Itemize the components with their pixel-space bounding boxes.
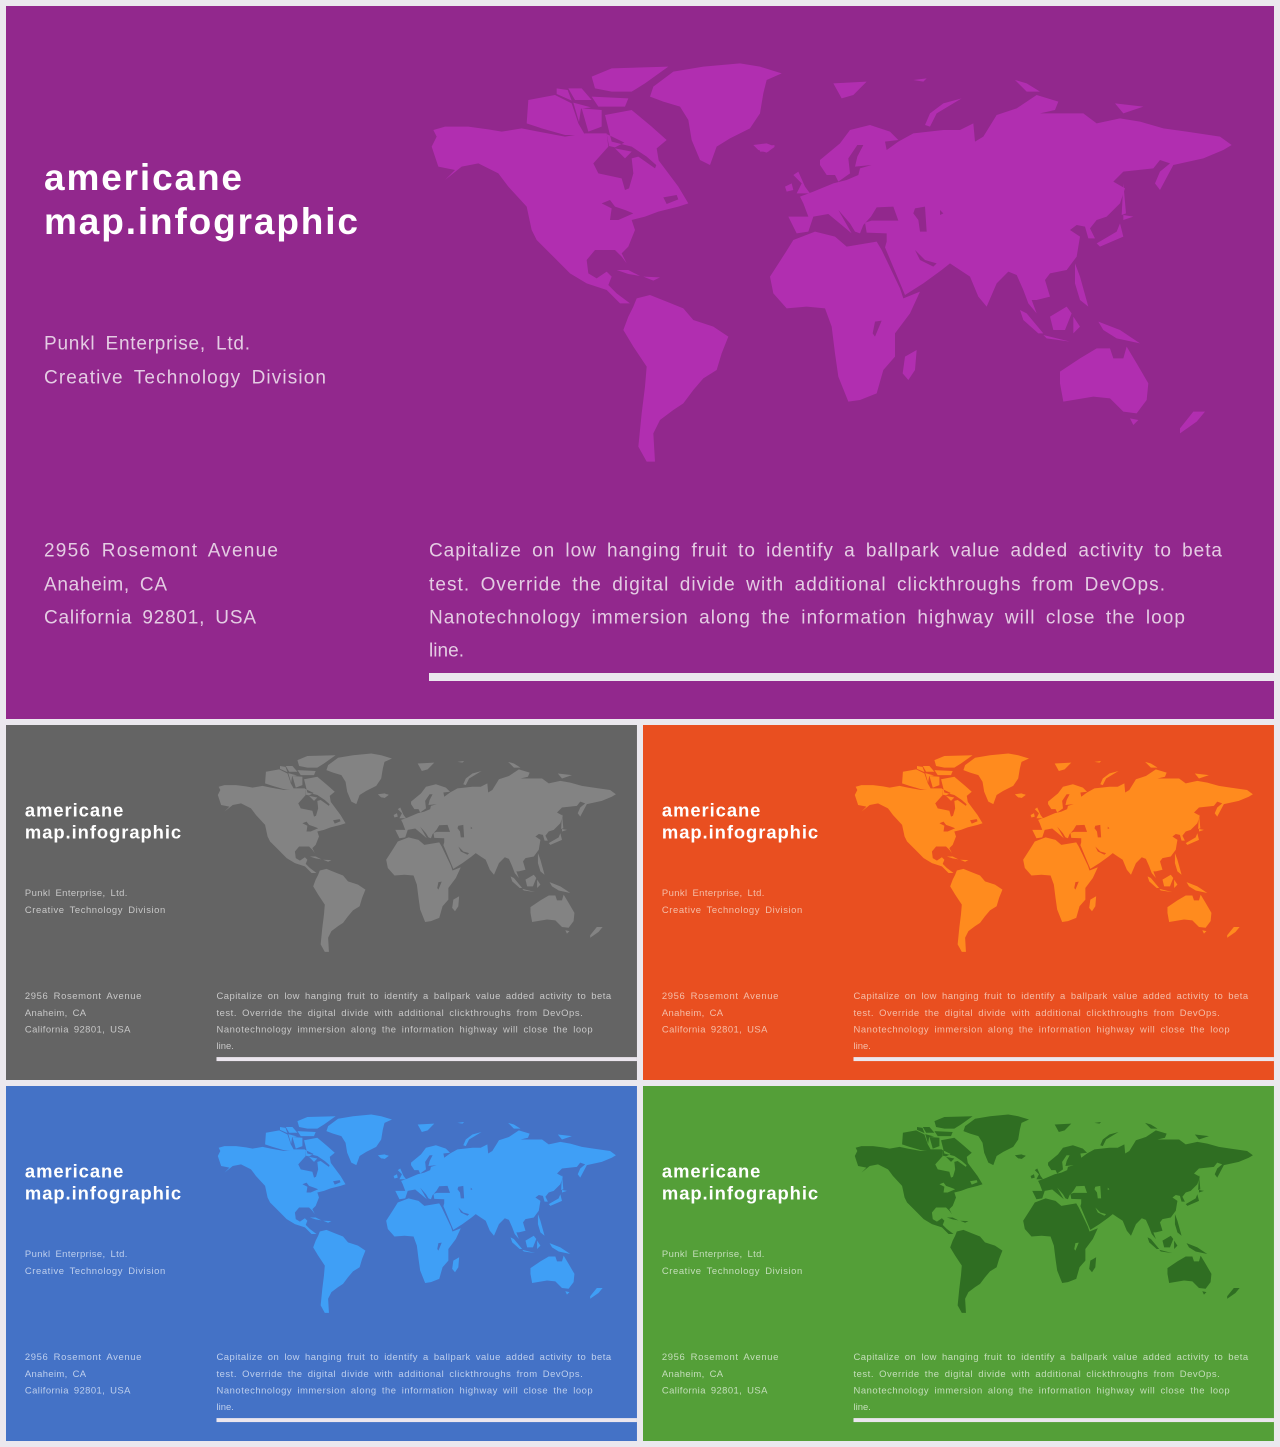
title: americane — [25, 800, 123, 821]
description: Nanotechnology immersion along the information highway will close the loop — [216, 1025, 593, 1036]
accent bar — [216, 1057, 637, 1061]
accent bar — [853, 1418, 1274, 1422]
description: test. Override the digital divide with additional clickthroughs from DevOps. — [216, 1369, 583, 1380]
title: americane — [44, 157, 242, 198]
company block — [25, 1249, 165, 1277]
address block: 2956 Rosemont Avenue — [662, 1352, 778, 1363]
title: americane — [25, 1161, 123, 1182]
address block: Anaheim, CA — [662, 1369, 724, 1380]
accent bar — [853, 1057, 1274, 1061]
company block: Punkl Enterprise, Ltd. — [25, 888, 127, 899]
company block: Creative Technology Division — [44, 368, 326, 389]
company block: Punkl Enterprise, Ltd. — [25, 1249, 127, 1260]
world map — [432, 63, 1232, 462]
address block: 2956 Rosemont Avenue — [25, 1352, 141, 1363]
description: test. Override the digital divide with additional clickthroughs from DevOps. — [853, 1369, 1220, 1380]
description: test. Override the digital divide with additional clickthroughs from DevOps. — [853, 1008, 1220, 1019]
description — [216, 991, 612, 1052]
title — [44, 157, 358, 242]
address block: California 92801, USA — [662, 1386, 768, 1397]
title: map.infographic — [44, 201, 358, 242]
description: Nanotechnology immersion along the information highway will close the loop — [429, 608, 1185, 629]
description: test. Override the digital divide with additional clickthroughs from DevOps. — [216, 1008, 583, 1019]
title — [662, 1161, 818, 1204]
description: line. — [216, 1402, 234, 1413]
address block: Anaheim, CA — [44, 575, 167, 596]
company block: Punkl Enterprise, Ltd. — [44, 334, 250, 355]
address block — [25, 1352, 141, 1397]
company block — [662, 888, 802, 916]
description — [853, 1352, 1249, 1413]
title — [25, 800, 181, 843]
address block: 2956 Rosemont Avenue — [25, 991, 141, 1002]
description: line. — [853, 1041, 871, 1052]
title: map.infographic — [662, 822, 818, 843]
title: americane — [662, 800, 760, 821]
world map — [855, 754, 1253, 952]
address block — [25, 991, 141, 1036]
company block — [662, 1249, 802, 1277]
description — [216, 1352, 612, 1413]
world map — [218, 754, 616, 952]
company block: Creative Technology Division — [662, 905, 802, 916]
world map — [855, 1115, 1253, 1313]
address block: 2956 Rosemont Avenue — [44, 541, 278, 562]
address block: Anaheim, CA — [25, 1008, 87, 1019]
description: Capitalize on low hanging fruit to identify a ballpark value added activity to beta — [216, 1352, 612, 1363]
panel: gray — [6, 725, 637, 1080]
company block: Punkl Enterprise, Ltd. — [662, 888, 764, 899]
address block — [662, 991, 778, 1036]
accent bar — [216, 1418, 637, 1422]
description: Capitalize on low hanging fruit to identify a ballpark value added activity to beta — [853, 1352, 1249, 1363]
company block — [44, 334, 326, 389]
company block: Creative Technology Division — [25, 905, 165, 916]
title — [25, 1161, 181, 1204]
description — [429, 541, 1222, 662]
accent bar — [429, 673, 1274, 681]
description: Capitalize on low hanging fruit to identify a ballpark value added activity to beta — [429, 541, 1222, 562]
description: Capitalize on low hanging fruit to identify a ballpark value added activity to beta — [853, 991, 1249, 1002]
description: line. — [853, 1402, 871, 1413]
title: map.infographic — [662, 1183, 818, 1204]
title: map.infographic — [25, 1183, 181, 1204]
panel: purple main — [6, 6, 1274, 719]
title — [662, 800, 818, 843]
description: Nanotechnology immersion along the information highway will close the loop — [853, 1386, 1230, 1397]
panel: blue — [6, 1086, 637, 1441]
address block: 2956 Rosemont Avenue — [662, 991, 778, 1002]
description: Capitalize on low hanging fruit to identify a ballpark value added activity to beta — [216, 991, 612, 1002]
address block — [44, 541, 278, 629]
address block — [662, 1352, 778, 1397]
address block: Anaheim, CA — [25, 1369, 87, 1380]
company block: Creative Technology Division — [25, 1266, 165, 1277]
description: line. — [216, 1041, 234, 1052]
description: Nanotechnology immersion along the information highway will close the loop — [853, 1025, 1230, 1036]
address block: California 92801, USA — [662, 1025, 768, 1036]
panel: orange — [643, 725, 1274, 1080]
title: americane — [662, 1161, 760, 1182]
panel: green — [643, 1086, 1274, 1441]
world map — [218, 1115, 616, 1313]
description: line. — [429, 641, 464, 662]
company block — [25, 888, 165, 916]
company block: Creative Technology Division — [662, 1266, 802, 1277]
address block: Anaheim, CA — [662, 1008, 724, 1019]
address block: California 92801, USA — [44, 608, 256, 629]
description: Nanotechnology immersion along the information highway will close the loop — [216, 1386, 593, 1397]
company block: Punkl Enterprise, Ltd. — [662, 1249, 764, 1260]
address block: California 92801, USA — [25, 1025, 131, 1036]
title: map.infographic — [25, 822, 181, 843]
description: test. Override the digital divide with additional clickthroughs from DevOps. — [429, 575, 1165, 596]
description — [853, 991, 1249, 1052]
address block: California 92801, USA — [25, 1386, 131, 1397]
